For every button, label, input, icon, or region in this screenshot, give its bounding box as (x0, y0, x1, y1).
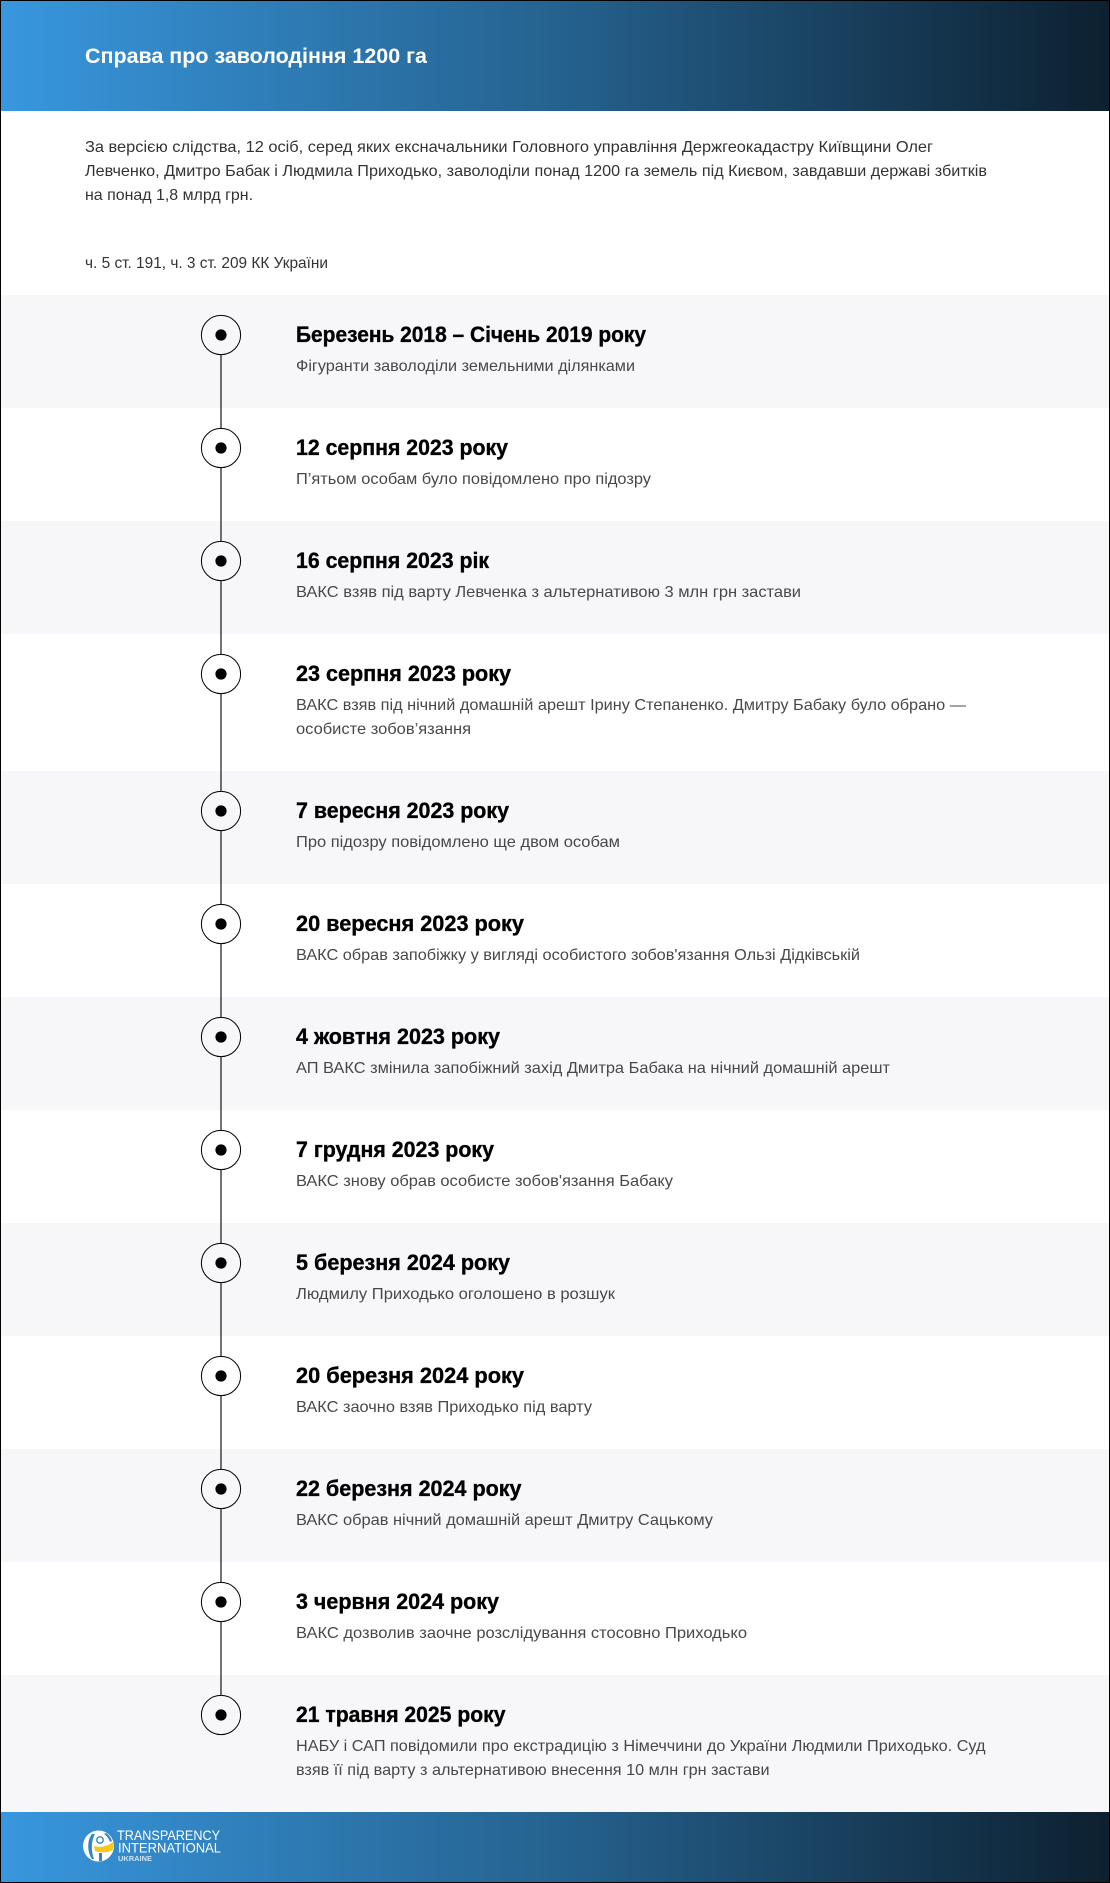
logo: Transparency International Ukraine (83, 1827, 221, 1863)
marker (201, 654, 241, 694)
timeline connector line (220, 355, 222, 1695)
logo wordmark (117, 1827, 221, 1863)
date: 7 грудня 2023 року (296, 1137, 495, 1162)
marker (201, 904, 241, 944)
intro paragraph (85, 139, 987, 204)
intro paragraph: на понад 1,8 млрд грн. (85, 187, 253, 204)
timeline row: 7 грудня 2023 року (0, 1110, 1110, 1223)
date: 5 березня 2024 року (296, 1250, 511, 1275)
description: ВАКС знову обрав особисте зобов'язання Бабаку (296, 1173, 673, 1190)
description: особисте зобов’язання (296, 721, 471, 738)
title: Справа про заволодіння 1200 га (85, 45, 427, 68)
date: 20 березня 2024 року (296, 1363, 525, 1388)
date: 12 серпня 2023 року (296, 435, 509, 460)
legal articles: ч. 5 ст. 191, ч. 3 ст. 209 КК України (85, 255, 328, 272)
description: Людмилу Приходько оголошено в розшук (296, 1286, 616, 1303)
icon: logo globe with figure (83, 1830, 114, 1862)
date: 22 березня 2024 року (296, 1476, 522, 1501)
date: 4 жовтня 2023 року (296, 1024, 501, 1049)
marker (201, 1017, 241, 1057)
description (296, 1738, 986, 1779)
footer banner (0, 1812, 1110, 1883)
description: ВАКС взяв під варту Левченка з альтернативою 3 млн грн застави (296, 584, 801, 601)
timeline row: 23 серпня 2023 року (0, 634, 1110, 771)
date: 16 серпня 2023 рік (296, 548, 490, 573)
timeline row: 21 травня 2025 року (0, 1675, 1110, 1812)
date: Березень 2018 – Січень 2019 року (296, 322, 647, 347)
description: ВАКС дозволив заочне розслідування стосовно Приходько (296, 1625, 747, 1642)
description: Фігуранти заволоділи земельними ділянками (296, 358, 635, 375)
marker (201, 1469, 241, 1509)
description: взяв її під варту з альтернативою внесення 10 млн грн застави (296, 1762, 770, 1779)
description: НАБУ і САП повідомили про екстрадицію з Німеччини до України Людмили Приходько. Суд (296, 1738, 986, 1755)
timeline row: Березень 2018 – Січень 2019 року (0, 295, 1110, 408)
description: ВАКС обрав нічний домашній арешт Дмитру Сацькому (296, 1512, 713, 1529)
marker (201, 1695, 241, 1735)
date: 7 вересня 2023 року (296, 798, 510, 823)
description: Про підозру повідомлено ще двом особам (296, 834, 620, 851)
timeline row: 20 вересня 2023 року (0, 884, 1110, 997)
timeline row: 5 березня 2024 року (0, 1223, 1110, 1336)
description (296, 697, 966, 738)
timeline row: 12 серпня 2023 року (0, 408, 1110, 521)
description: ВАКС обрав запобіжку у вигляді особистого зобов'язання Ользі Дідківській (296, 947, 860, 964)
description: П’ятьом особам було повідомлено про підозру (296, 471, 651, 488)
date: 3 червня 2024 року (296, 1589, 500, 1614)
marker (201, 791, 241, 831)
marker (201, 1243, 241, 1283)
timeline row: 4 жовтня 2023 року (0, 997, 1110, 1110)
description: ВАКС взяв під нічний домашній арешт Ірину Степаненко. Дмитру Бабаку було обрано — (296, 697, 966, 714)
marker (201, 428, 241, 468)
timeline row: 7 вересня 2023 року (0, 771, 1110, 884)
marker (201, 541, 241, 581)
marker (201, 315, 241, 355)
marker (201, 1356, 241, 1396)
date: 23 серпня 2023 року (296, 661, 512, 686)
intro paragraph: Левченко, Дмитро Бабак і Людмила Приходько, заволоділи понад 1200 га земель під Києвом, завдавши державі збитків (85, 163, 987, 180)
logo wordmark: UKRAINE (118, 1856, 152, 1863)
marker (201, 1582, 241, 1622)
timeline row: 3 червня 2024 року (0, 1562, 1110, 1675)
header banner (0, 0, 1110, 111)
description: ВАКС заочно взяв Приходько під варту (296, 1399, 592, 1416)
marker (201, 1130, 241, 1170)
logo wordmark: TRANSPARENCY (117, 1827, 221, 1843)
timeline row: 22 березня 2024 року (0, 1449, 1110, 1562)
timeline row: 20 березня 2024 року (0, 1336, 1110, 1449)
timeline row: 16 серпня 2023 рік (0, 521, 1110, 634)
logo wordmark: INTERNATIONAL (118, 1840, 221, 1856)
date: 20 вересня 2023 року (296, 911, 525, 936)
date: 21 травня 2025 року (296, 1702, 506, 1727)
description: АП ВАКС змінила запобіжний захід Дмитра Бабака на нічний домашній арешт (296, 1060, 891, 1077)
intro paragraph: За версією слідства, 12 осіб, серед яких ексначальники Головного управління Держгеокадастру Київщини Олег (85, 139, 933, 156)
